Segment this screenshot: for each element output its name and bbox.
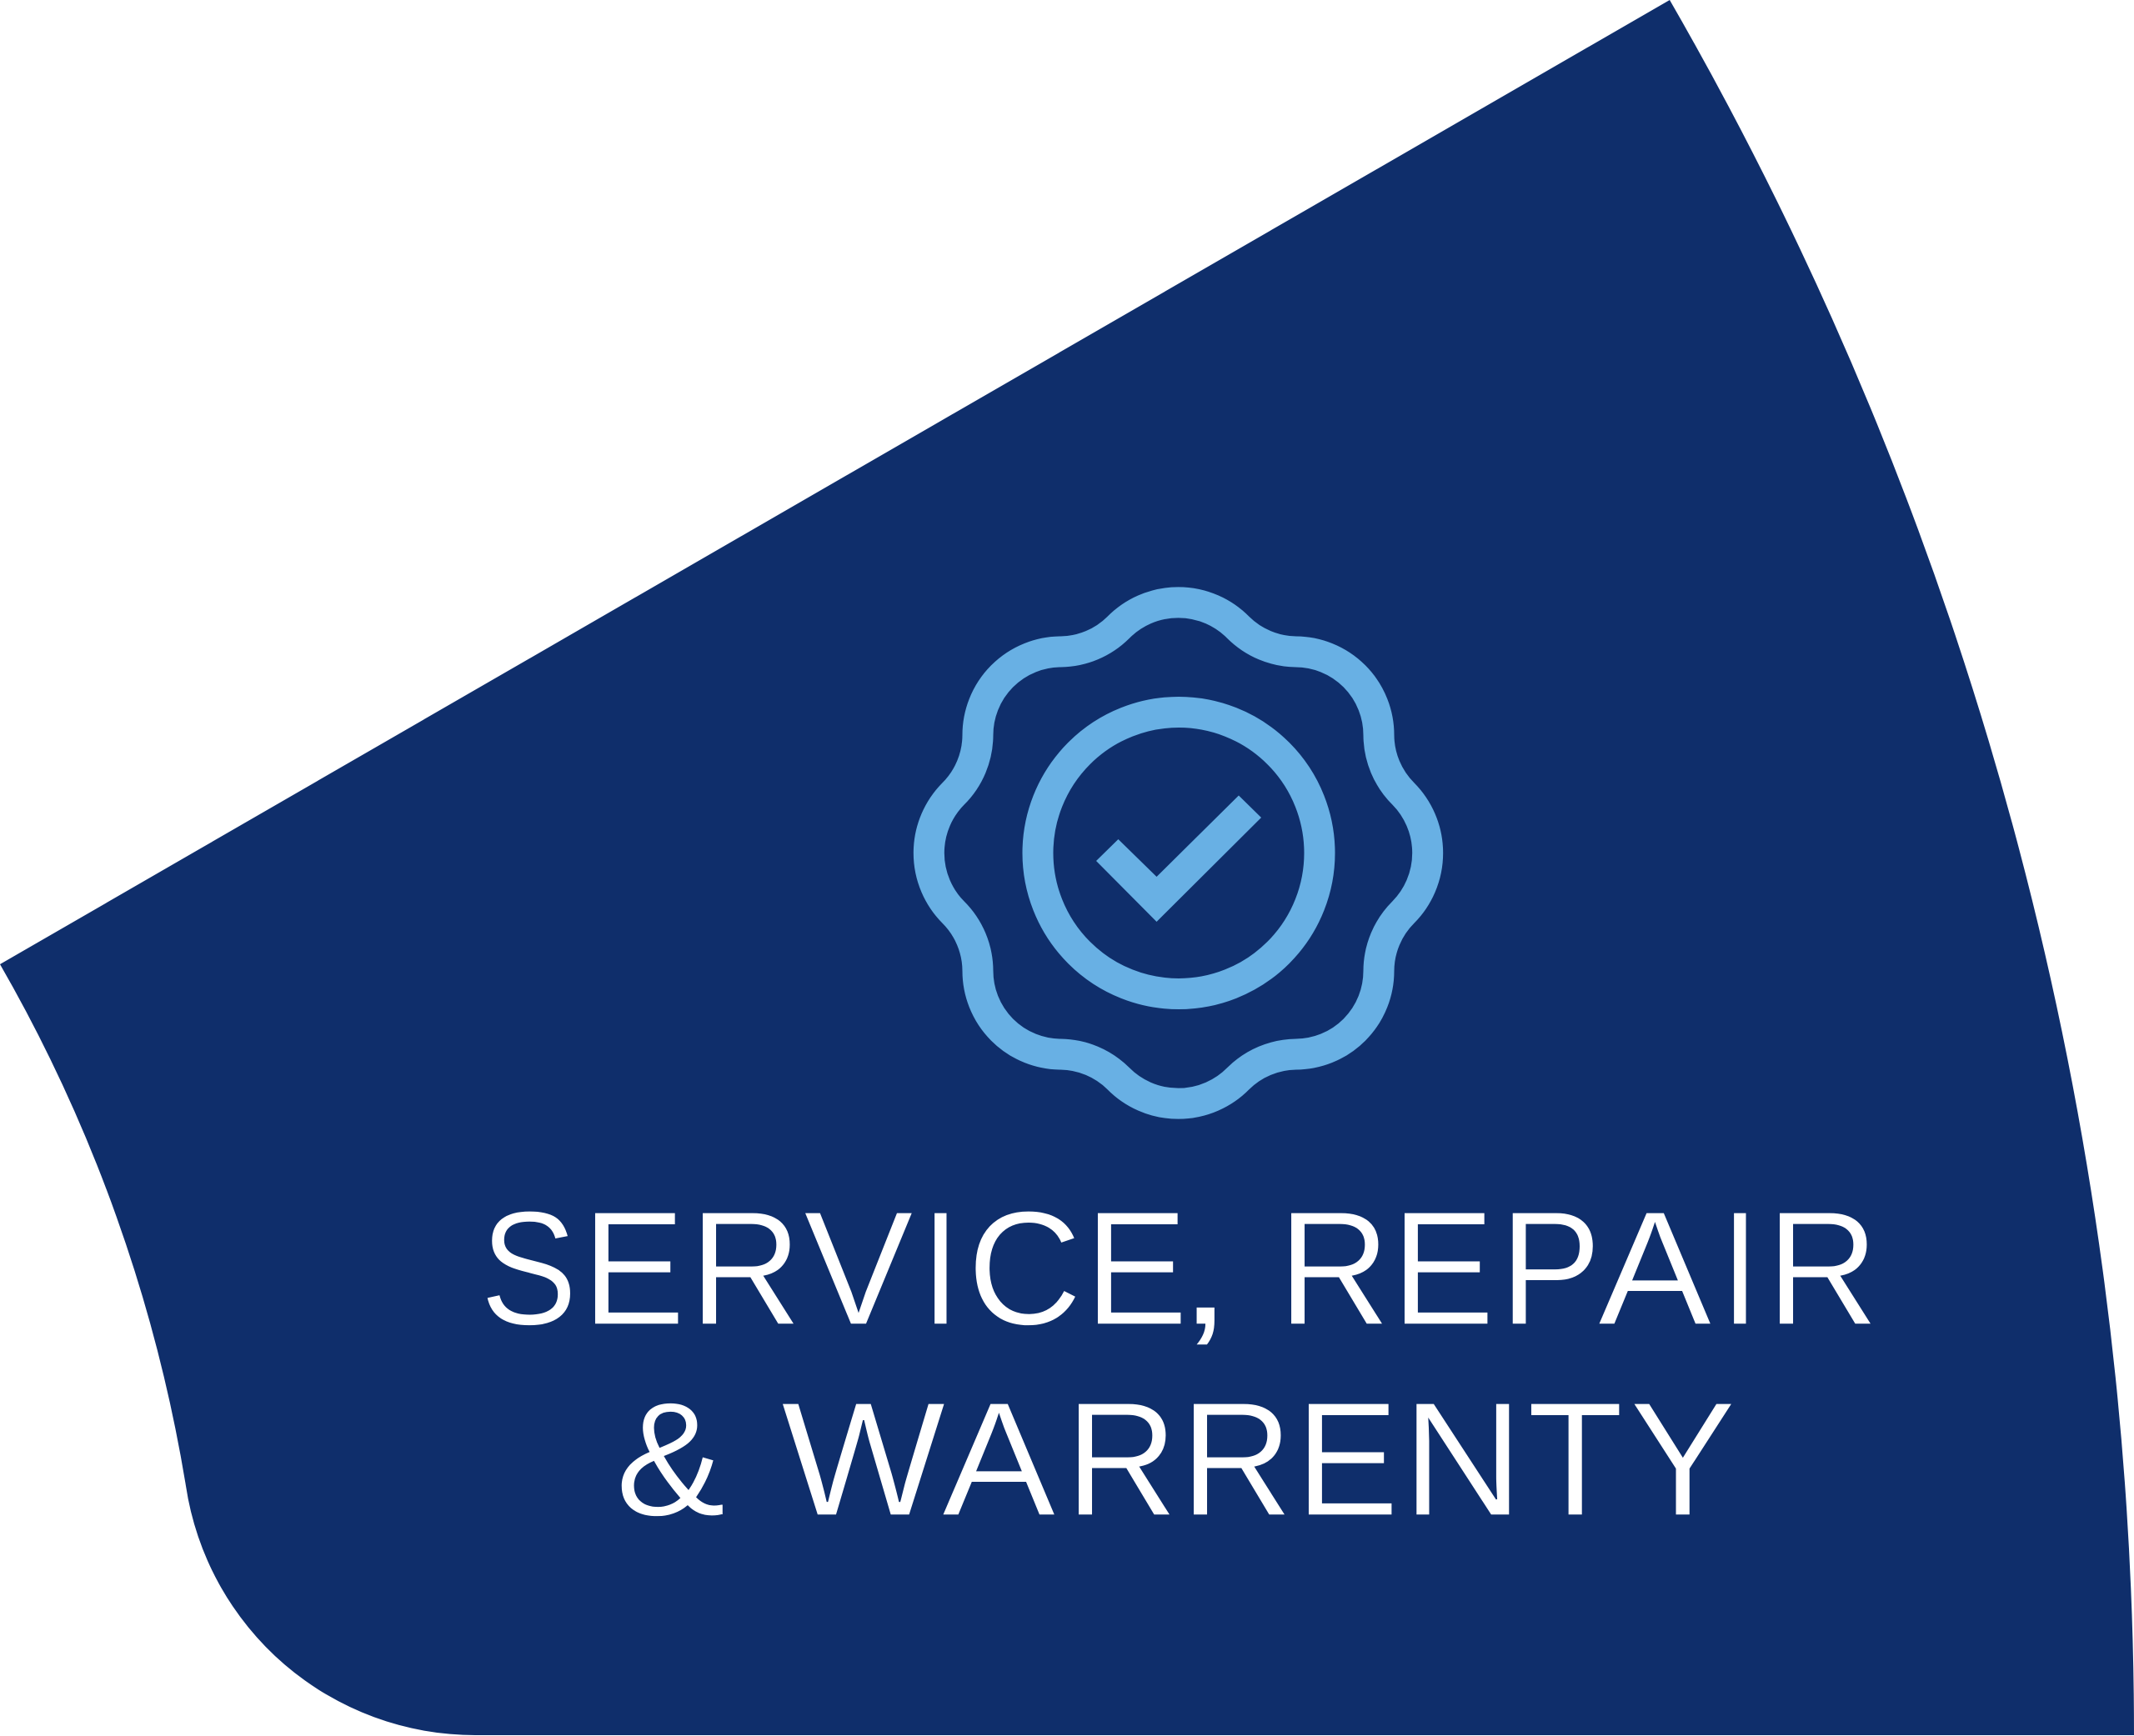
title line 1: I xyxy=(1721,1178,1759,1359)
title line 2: W xyxy=(781,1368,945,1550)
title line 1: P xyxy=(1500,1178,1601,1359)
title line 1: A xyxy=(1598,1178,1711,1359)
title line 1: E xyxy=(582,1178,685,1359)
title line 2 xyxy=(615,1368,1736,1550)
icon: check mark xyxy=(1096,795,1261,922)
title line 2: R xyxy=(1180,1368,1293,1550)
icon: quality badge with check mark xyxy=(929,603,1428,1103)
title line 2: A xyxy=(942,1368,1055,1550)
title line 1: V xyxy=(804,1178,914,1359)
title line 2: R xyxy=(1065,1368,1178,1550)
title line 1 xyxy=(480,1178,1879,1359)
title line 2: & xyxy=(615,1368,726,1550)
title: service, repair and warrenty xyxy=(480,1178,1879,1550)
title line 1: R xyxy=(689,1178,802,1359)
title line 2: E xyxy=(1295,1368,1399,1550)
title line 1: R xyxy=(1278,1178,1390,1359)
title line 1: E xyxy=(1391,1178,1495,1359)
title line 2: Y xyxy=(1630,1368,1736,1550)
icon: inner ring xyxy=(1038,712,1320,993)
title line 1: I xyxy=(921,1178,960,1359)
title line 1: , xyxy=(1177,1178,1234,1359)
title line 2: N xyxy=(1402,1368,1524,1550)
title line 1: E xyxy=(1085,1178,1188,1359)
icon: scalloped badge outline xyxy=(929,603,1428,1103)
title line 1: C xyxy=(967,1178,1082,1359)
title line 1: S xyxy=(480,1178,578,1359)
title line 2: T xyxy=(1527,1368,1623,1550)
title line 1: R xyxy=(1766,1178,1879,1359)
